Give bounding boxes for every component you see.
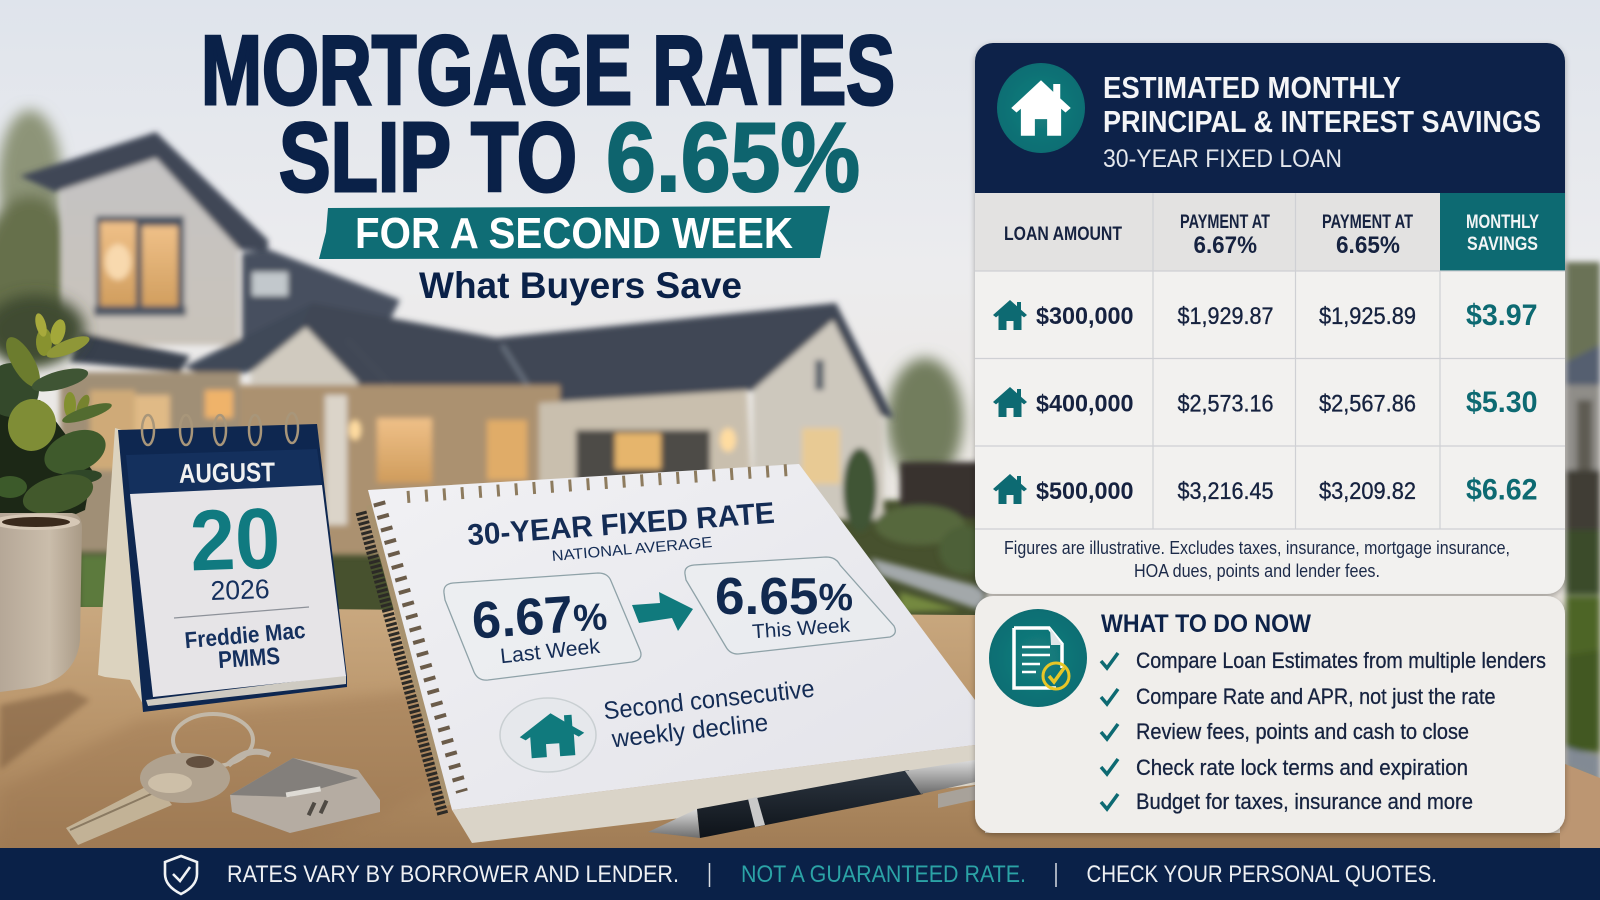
top rings: [407, 470, 789, 497]
row: $500,000: $6.62: [1466, 474, 1538, 506]
footer text 2: NOT A GUARANTEED RATE.: [741, 861, 1026, 888]
icon: house in circle: [500, 698, 596, 772]
row: $500,000: [993, 474, 1538, 506]
pot: [0, 513, 82, 692]
heading: WHAT TO DO NOW: [1101, 610, 1311, 638]
column: monthly savings: SAVINGS: [1467, 234, 1538, 255]
notebook page: [368, 464, 975, 810]
spiral notebook: [361, 464, 975, 843]
right tree: [887, 358, 963, 482]
upper wall: [60, 145, 239, 345]
header title line 1: ESTIMATED MONTHLY: [1103, 70, 1401, 105]
card: this week: [685, 557, 895, 654]
highlighted rate: 6.65%: [606, 102, 860, 212]
subtitle: What Buyers Save: [419, 265, 742, 306]
item 3: Review fees, points and cash to close: [1136, 719, 1469, 744]
text: 30-year fixed rate: 30-YEAR FIXED RATE: [466, 497, 776, 552]
column: payment at 6.65%: [1322, 212, 1413, 259]
footer text 1: RATES VARY BY BORROWER AND LENDER.: [227, 861, 679, 888]
pen: [648, 760, 975, 838]
disclaimer: [1004, 538, 1510, 581]
garage: [576, 430, 710, 510]
keys with house keychain: [66, 714, 380, 845]
column: payment at 6.67%: 6.67%: [1194, 232, 1257, 259]
item 2: Compare Rate and APR, not just the rate: [1136, 684, 1496, 709]
column: payment at 6.67%: [1180, 212, 1270, 259]
ribbon: [319, 206, 830, 259]
last week label: Last Week: [499, 635, 601, 668]
window: [96, 216, 184, 316]
porch glows: [377, 418, 432, 483]
white page: [130, 485, 346, 697]
table column headers: [975, 193, 1565, 271]
text: 2026: 2026: [210, 574, 270, 606]
front gable wall: [251, 327, 358, 400]
row: $300,000: $1,925.89: [1319, 303, 1416, 330]
column: payment at 6.65%: PAYMENT AT: [1322, 212, 1413, 233]
arrow: [632, 592, 693, 631]
footer bar: [0, 848, 1600, 900]
row: $300,000: $1,929.87: [1178, 303, 1274, 330]
far right: [1566, 262, 1600, 362]
title: [201, 15, 895, 306]
header subtitle: 30-YEAR FIXED LOAN: [1103, 145, 1342, 173]
checklist: [1101, 648, 1546, 814]
row: $300,000: $300,000: [1036, 303, 1134, 330]
binder rings: [142, 413, 298, 445]
page block edge: [452, 745, 975, 843]
footer text 3: CHECK YOUR PERSONAL QUOTES.: [1086, 861, 1437, 888]
calendar back board: [118, 424, 347, 712]
key: [66, 782, 172, 845]
item 5: Budget for taxes, insurance and more: [1136, 789, 1473, 814]
calendar stand: [98, 428, 145, 708]
ribbon text: FOR A SECOND WEEK: [355, 209, 793, 258]
row: $400,000: $2,573.16: [1178, 390, 1274, 418]
page stack: [146, 675, 346, 706]
text: 20: 20: [188, 490, 282, 590]
plant in stone pot: [0, 295, 114, 692]
column: monthly savings: MONTHLY: [1466, 212, 1539, 233]
key ring: [173, 714, 253, 766]
spiral coil: [361, 512, 443, 815]
row: $400,000: $2,567.86: [1319, 390, 1416, 418]
fence and shrubs: [900, 462, 980, 518]
lower walls: [60, 372, 240, 552]
panel header: [975, 43, 1565, 193]
row: $500,000: $500,000: [1036, 478, 1134, 505]
item 1: Compare Loan Estimates from multiple lenders: [1136, 648, 1546, 673]
disclaimer: HOA dues, points and lender fees.: [1134, 561, 1380, 581]
row: $500,000: $3,216.45: [1178, 478, 1274, 505]
column: monthly savings: [1466, 212, 1539, 255]
column: payment at 6.65%: 6.65%: [1336, 232, 1400, 259]
lower left roof: [70, 332, 190, 372]
row: $500,000: $3,209.82: [1319, 478, 1416, 505]
icon: house: [997, 63, 1085, 153]
row: $400,000: [993, 386, 1538, 419]
text: national average: NATIONAL AVERAGE: [551, 534, 713, 565]
row: $400,000: $400,000: [1036, 390, 1134, 418]
text: second consecutive: Second consecutive: [602, 675, 816, 725]
header title line 2: PRINCIPAL & INTEREST SAVINGS: [1103, 104, 1541, 139]
main roof: [312, 303, 894, 418]
dormer roof: [242, 250, 400, 340]
row: $300,000: [993, 299, 1538, 332]
desk calendar: [98, 413, 347, 712]
icon: document with check: [989, 609, 1087, 707]
text: August: AUGUST: [179, 457, 276, 489]
icon: shield: [165, 856, 197, 894]
chain: [228, 752, 270, 765]
text: weekly decline: weekly decline: [609, 709, 770, 754]
house keychain: [230, 758, 380, 833]
upper gable roof: [20, 132, 268, 252]
left rings: [379, 502, 462, 792]
row: $400,000: $5.30: [1466, 386, 1538, 419]
last week rate: 6.67%: [470, 583, 609, 651]
this week rate: 6.65: [715, 568, 816, 626]
left tree: [0, 110, 62, 250]
panel: what to do now: [975, 596, 1565, 833]
month header: [126, 449, 322, 494]
disclaimer: Figures are illustrative. Excludes taxes, insurance, mortgage insurance,: [1004, 538, 1510, 558]
text: Freddie Mac: Freddie Mac: [184, 617, 307, 653]
table surface: [0, 607, 1600, 850]
title line 2: SLIP TO: [279, 102, 577, 212]
this week label: This Week: [751, 615, 852, 643]
title line 1: MORTGAGE RATES: [201, 15, 895, 125]
item 4: Check rate lock terms and expiration: [1136, 755, 1468, 780]
card: last week: [444, 573, 641, 680]
this week rate: %: [818, 577, 853, 619]
text: PMMS: PMMS: [217, 643, 281, 674]
column: loan amount: LOAN AMOUNT: [1004, 224, 1122, 245]
row: $300,000: $3.97: [1466, 299, 1538, 332]
panel: savings table: [975, 43, 1565, 594]
column: payment at 6.67%: PAYMENT AT: [1180, 212, 1270, 233]
leaves: [0, 295, 114, 530]
